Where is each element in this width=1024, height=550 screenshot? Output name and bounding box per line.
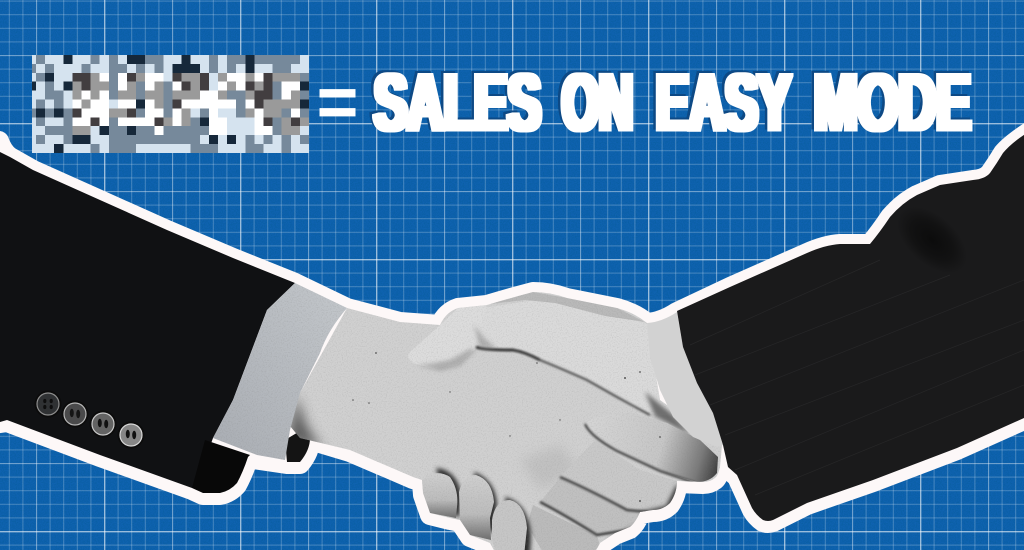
crease between hands xyxy=(476,347,650,415)
finger creases xyxy=(540,477,648,535)
right jacket sleeve xyxy=(677,131,1024,521)
title: sales on easy mode xyxy=(317,56,971,148)
dark lining under sleeve xyxy=(192,440,250,493)
hand base xyxy=(280,285,730,550)
title shadow: ON xyxy=(560,56,630,146)
title shadow xyxy=(372,56,968,146)
button 1 xyxy=(34,390,62,418)
knuckle finger 1 xyxy=(422,468,462,518)
wrist shading xyxy=(288,395,322,450)
right shirt cuff xyxy=(647,312,723,447)
title shadow: SALES xyxy=(372,56,538,146)
handshake cutout xyxy=(0,125,1024,550)
left shirt cuff xyxy=(210,280,350,465)
title shadow: EASY xyxy=(654,56,788,146)
index finger xyxy=(647,422,718,482)
skin blemishes xyxy=(352,352,661,502)
title text: ON xyxy=(562,58,633,148)
pinstripes xyxy=(690,260,1024,495)
knuckle finger 3 xyxy=(492,497,531,550)
upper hand behind xyxy=(470,300,672,416)
sleeve buttons xyxy=(34,390,144,448)
knuckle shading xyxy=(526,448,572,486)
title text: SALES xyxy=(374,58,541,148)
hands xyxy=(280,285,730,550)
hand skin texture xyxy=(280,285,730,550)
button 3 xyxy=(90,410,116,438)
white cutout outline xyxy=(0,125,1024,550)
middle finger xyxy=(666,482,677,506)
button 2 xyxy=(62,400,88,428)
censored word: pixel mosaic xyxy=(27,55,309,153)
title text xyxy=(374,58,971,148)
thumb xyxy=(408,305,487,369)
ring finger xyxy=(540,480,640,534)
title text: EASY xyxy=(656,58,791,148)
sleeve fold shadow xyxy=(885,194,979,286)
left jacket sleeve xyxy=(0,152,310,493)
button 4 xyxy=(118,422,144,448)
equals sign: = xyxy=(317,63,358,141)
little finger xyxy=(527,505,600,550)
knuckle finger 2 xyxy=(459,472,497,540)
